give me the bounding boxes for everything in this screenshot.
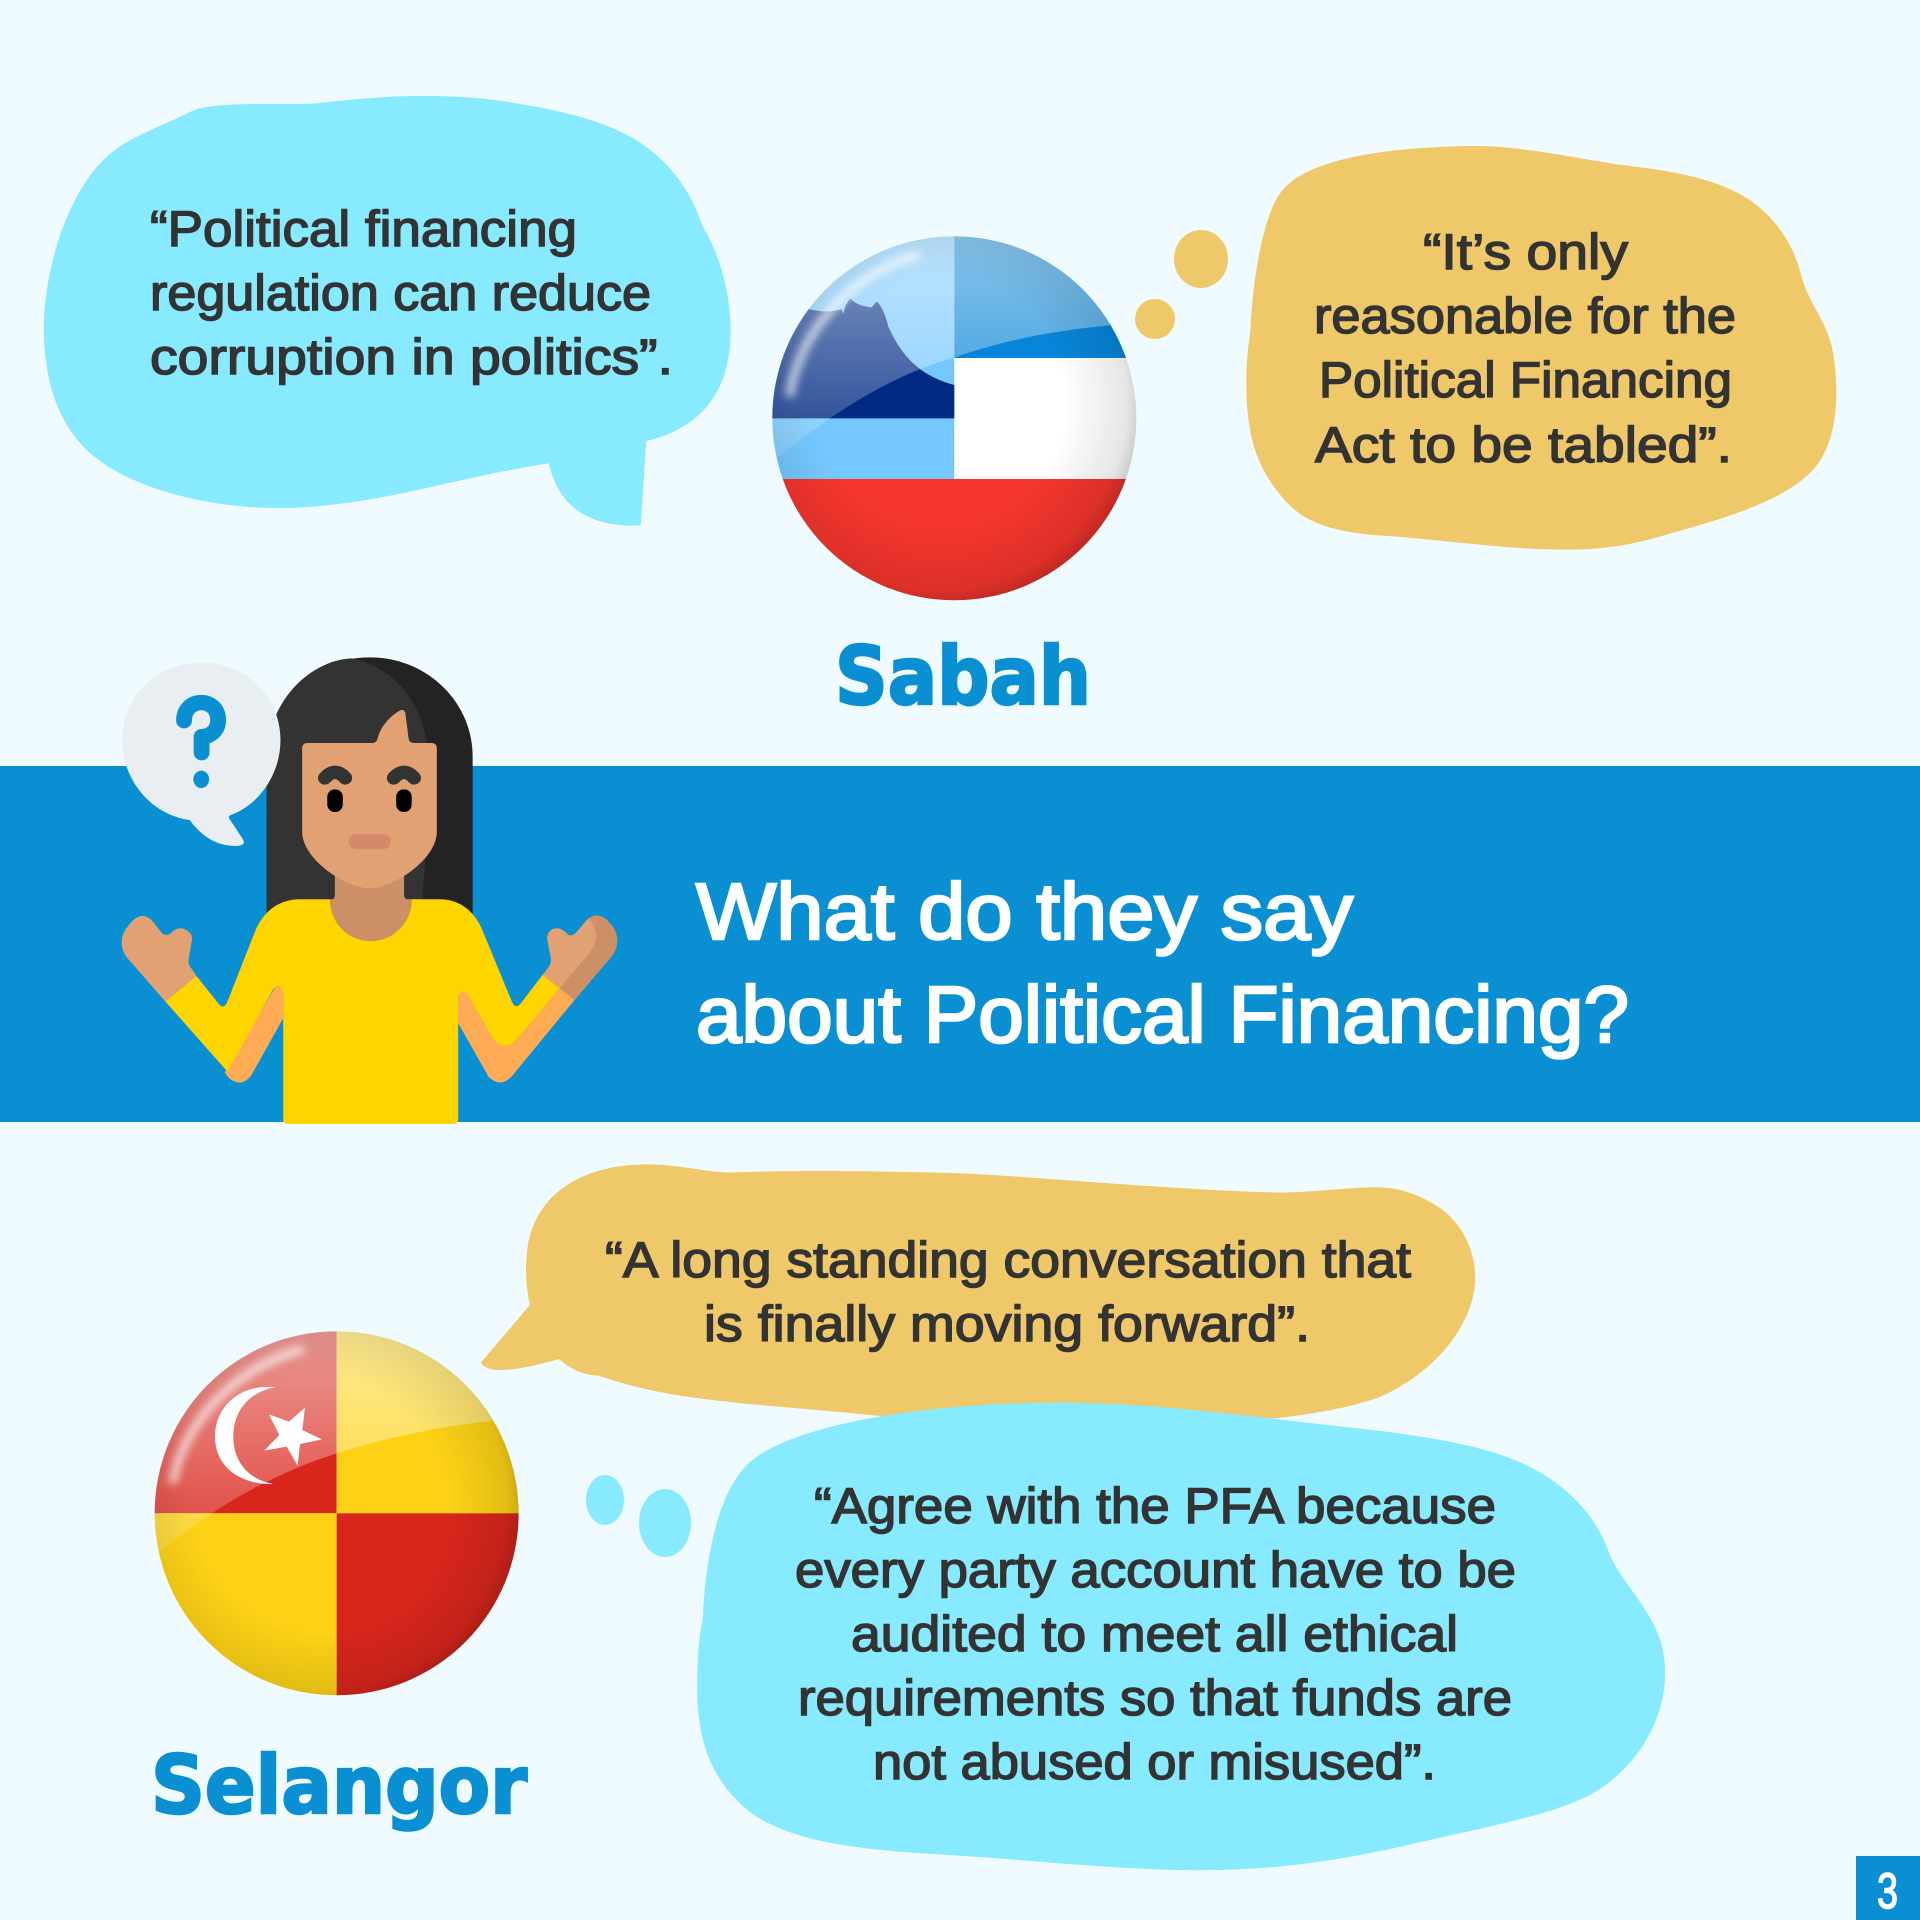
speech bubble: Political Financing Act: reasonable for the — [1314, 288, 1736, 344]
speech bubble: Political Financing Act — [1246, 146, 1836, 550]
speech bubble: Political Financing Act: “It’s only — [1423, 224, 1628, 280]
icon: Sabah flag badge — [772, 236, 1136, 600]
page number — [1856, 1856, 1920, 1920]
speech bubble: agree with the PFA — [697, 1403, 1665, 1870]
speech bubble: agree with the PFA: every party account have to be — [795, 1542, 1516, 1598]
speech bubble: agree with the PFA: audited to meet all ethical — [851, 1606, 1458, 1662]
title text: What do they say — [696, 867, 1353, 956]
speech bubble: long standing conversation: “A long standing conversation that — [605, 1232, 1411, 1288]
speech bubble: political financing regulation: “Political financing — [150, 201, 577, 257]
speech bubble: political financing regulation: regulation can reduce — [150, 265, 651, 321]
speech bubble: long standing conversation: is finally moving forward”. — [704, 1296, 1310, 1352]
label: Selangor: Selangor — [151, 1739, 528, 1832]
title text: about Political Financing? — [696, 970, 1629, 1059]
page number: 3 — [1877, 1863, 1898, 1919]
icon: confused person with question bubble — [122, 657, 617, 1124]
label: Sabah: Sabah — [835, 630, 1091, 723]
speech bubble: agree with the PFA: “Agree with the PFA because — [814, 1478, 1496, 1534]
speech bubble: agree with the PFA: not abused or misused”. — [873, 1734, 1436, 1790]
speech bubble: political financing regulation: corruption in politics”. — [150, 329, 673, 385]
speech bubble: Political Financing Act: Political Financing — [1319, 352, 1732, 408]
speech bubble: long standing conversation — [481, 1164, 1475, 1418]
icon: thought dots, Selangor — [586, 1475, 691, 1557]
title text — [696, 867, 1629, 1059]
icon: Selangor flag badge — [154, 1331, 519, 1696]
speech bubble: agree with the PFA: requirements so that funds are — [798, 1670, 1512, 1726]
title band — [0, 766, 1920, 1122]
speech bubble: political financing regulation — [44, 96, 731, 526]
icon: thought dots, Sabah — [1135, 230, 1228, 339]
speech bubble: Political Financing Act: Act to be tabled”. — [1315, 417, 1732, 473]
